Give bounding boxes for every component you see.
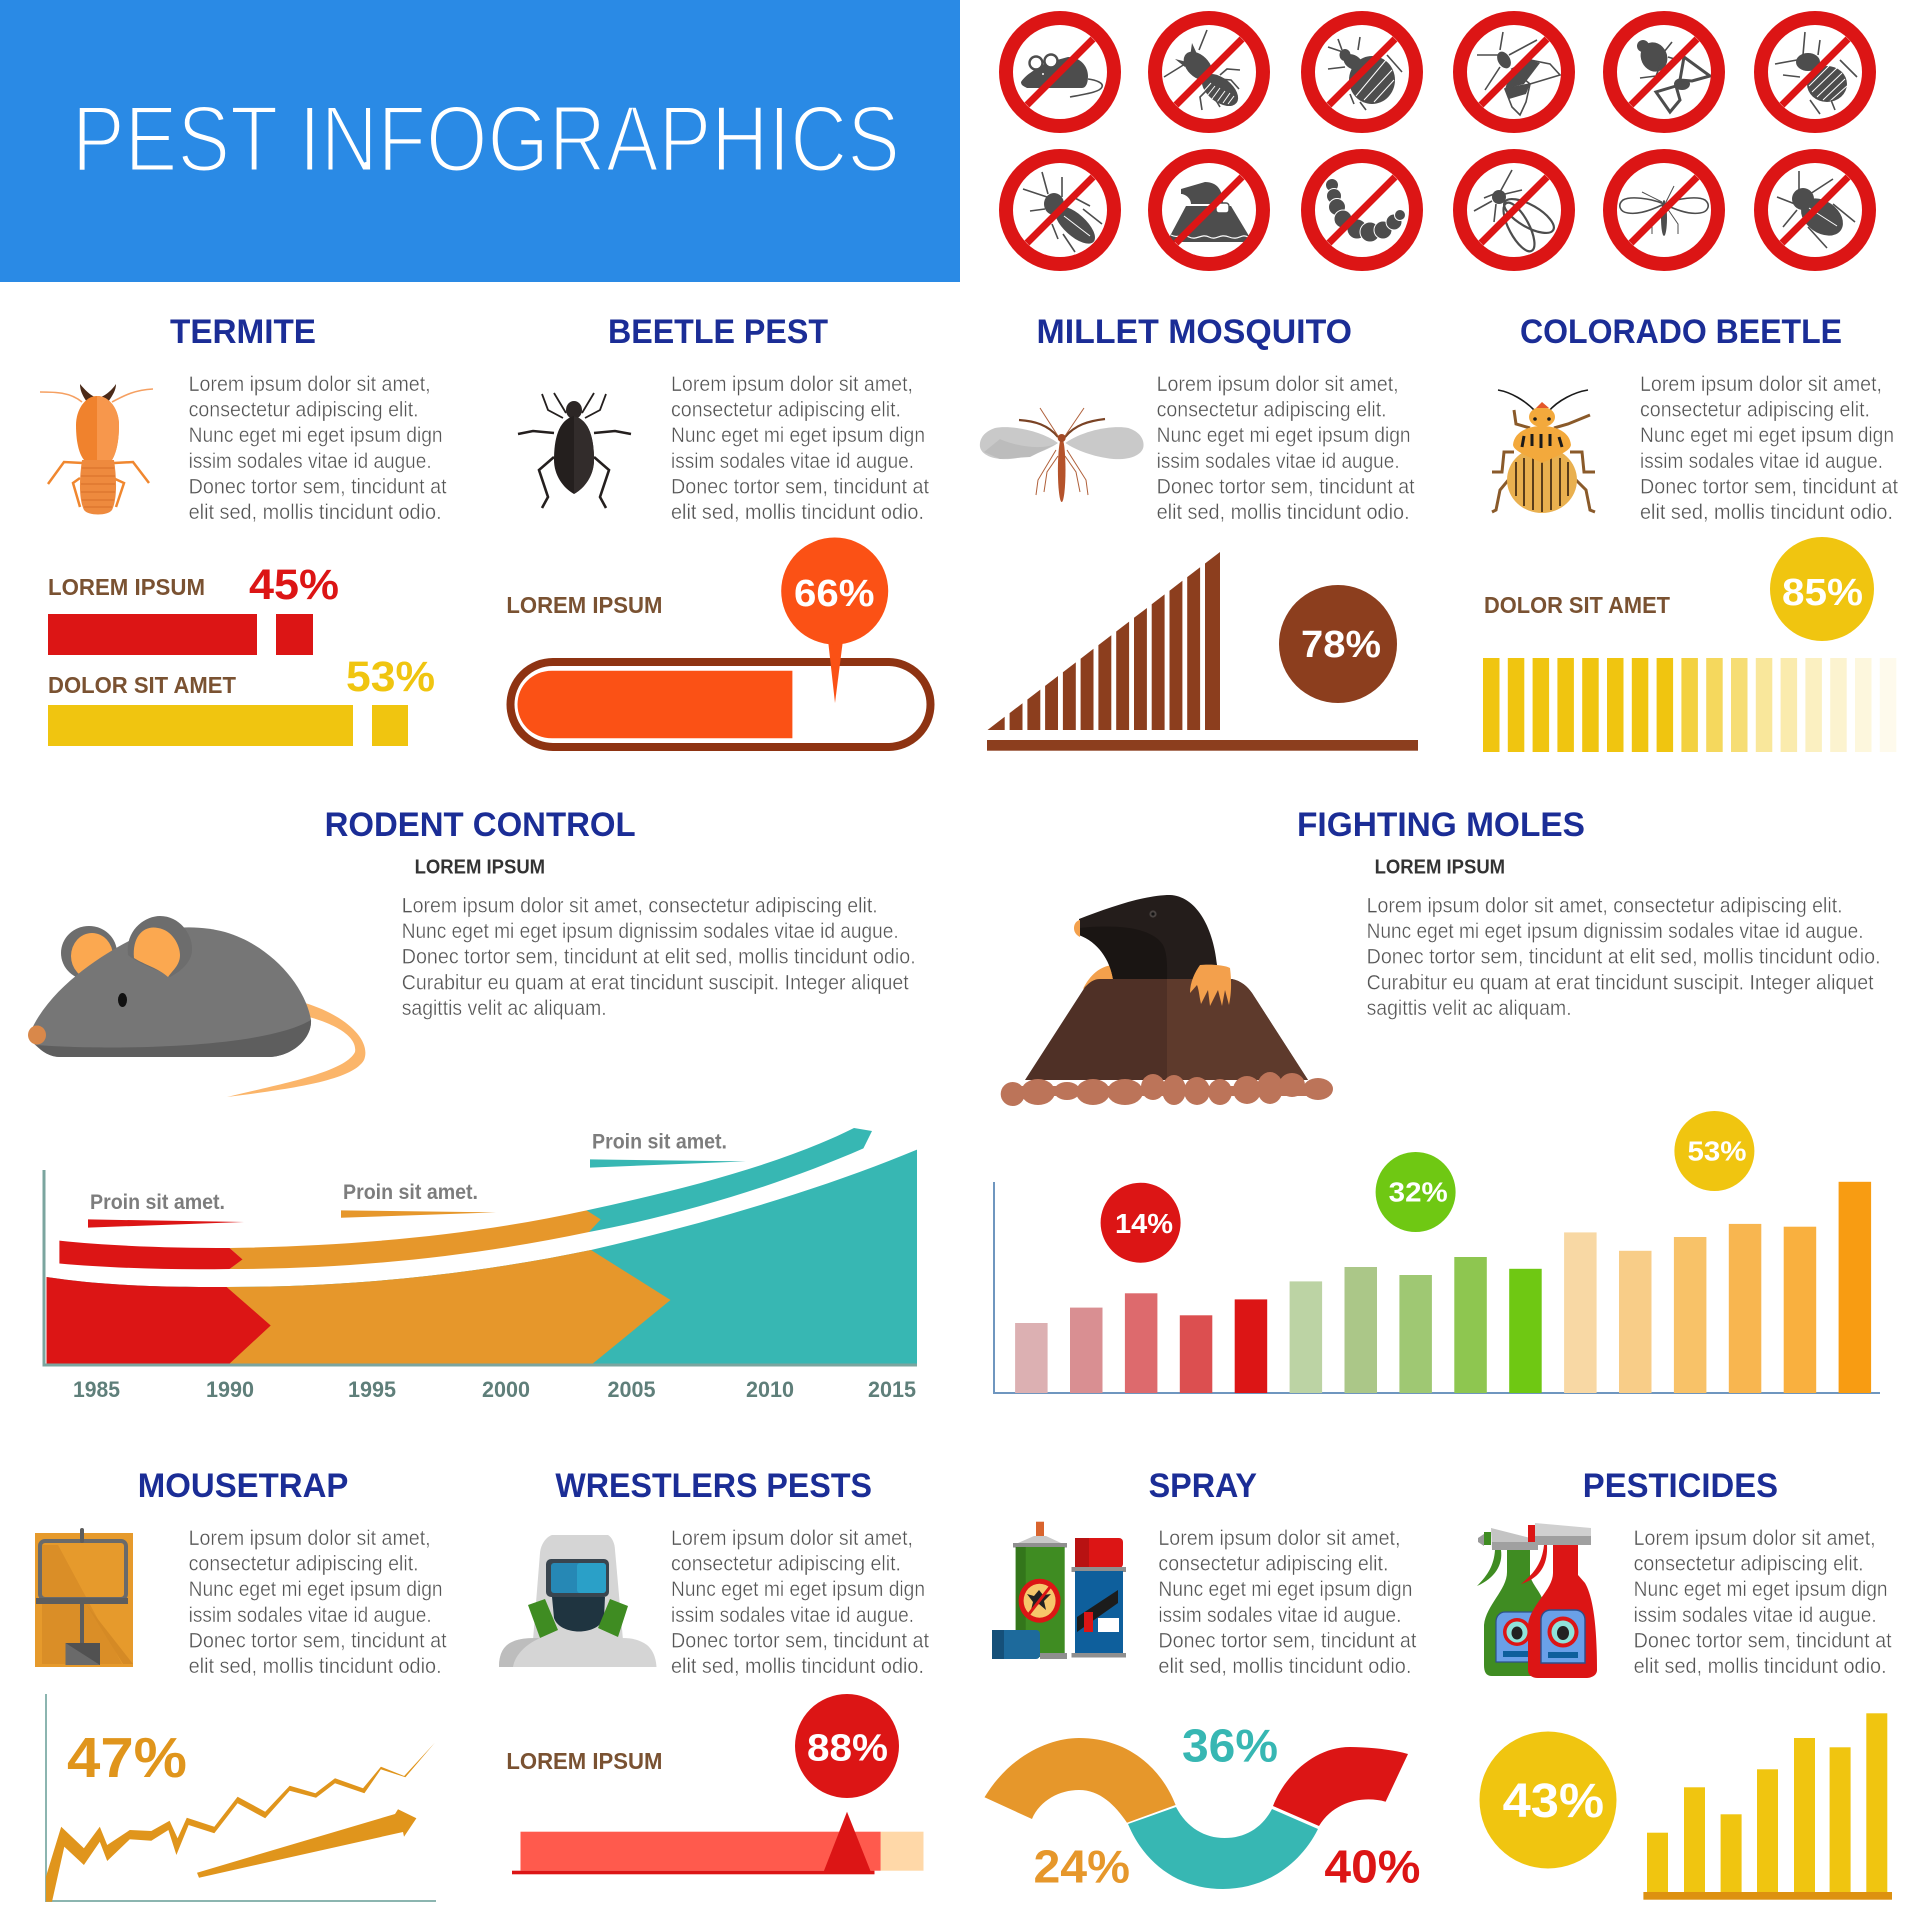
text block [1640, 373, 1898, 524]
text block: elit sed, mollis tincidunt odio. [189, 1655, 442, 1678]
text block: elit sed, mollis tincidunt odio. [671, 1655, 924, 1678]
text block: consectetur adipiscing elit. [189, 1553, 419, 1576]
wave chart: 24% [1034, 1841, 1130, 1893]
text block: issim sodales vitae id augue. [671, 1604, 914, 1627]
capsule progress chart 66%: LOREM IPSUM [506, 592, 662, 618]
text block [671, 373, 929, 524]
bar chart: two progress bars [48, 561, 435, 746]
text block: Nunc eget mi eget ipsum dignissim sodales vitae id augue. [1367, 920, 1864, 943]
bar chart: two progress bars: LOREM IPSUM [48, 574, 205, 600]
text block: issim sodales vitae id augue. [1157, 450, 1400, 473]
stepped bar chart 78% [987, 552, 1418, 751]
callout: 32% [1376, 1152, 1456, 1232]
capsule progress chart 66% [506, 538, 930, 747]
callout: 32%: 32% [1389, 1176, 1448, 1207]
text block: Nunc eget mi eget ipsum dign [1157, 424, 1411, 447]
illustration: mole on mound [1001, 895, 1333, 1106]
text block: elit sed, mollis tincidunt odio. [189, 501, 442, 524]
text block: elit sed, mollis tincidunt odio. [1634, 1655, 1887, 1678]
text block: Lorem ipsum dolor sit amet, [671, 1527, 913, 1550]
text block: issim sodales vitae id augue. [189, 450, 432, 473]
icon: no winged fly [1460, 156, 1568, 264]
icon: no moth [1460, 18, 1568, 126]
icon: black beetle [518, 393, 631, 508]
wave chart: 36% [1182, 1720, 1278, 1772]
callout: first period [88, 1191, 244, 1228]
callout: 53% [1674, 1111, 1754, 1191]
line chart 47% [46, 1694, 436, 1902]
text block: Donec tortor sem, tincidunt at [671, 1629, 929, 1652]
year labels: 2000 [482, 1377, 530, 1402]
year labels [73, 1377, 916, 1402]
text block: consectetur adipiscing elit. [189, 399, 419, 422]
icon: spray bottles [1477, 1523, 1597, 1678]
prohibition icons grid [1006, 18, 1869, 264]
bar chart with 43% circle [1480, 1713, 1892, 1900]
text block: issim sodales vitae id augue. [1158, 1604, 1401, 1627]
year labels: 1995 [348, 1377, 396, 1402]
text block: Lorem ipsum dolor sit amet, consectetur adipiscing elit. [1367, 894, 1843, 918]
panel: rodent control [28, 806, 917, 1402]
heading: mousetrap: MOUSETRAP [138, 1467, 348, 1505]
text block: Donec tortor sem, tincidunt at [1634, 1629, 1892, 1652]
year labels: 2005 [608, 1377, 656, 1402]
text block: Lorem ipsum dolor sit amet, [1640, 373, 1882, 396]
text block: Donec tortor sem, tincidunt at elit sed, mollis tincidunt odio. [402, 946, 916, 969]
text block: elit sed, mollis tincidunt odio. [1158, 1655, 1411, 1678]
icon: no bug [1308, 18, 1416, 126]
icon: mosquito [980, 408, 1144, 502]
heading: beetle pest: BEETLE PEST [608, 313, 828, 351]
year labels: 2015 [868, 1377, 916, 1402]
text block: elit sed, mollis tincidunt odio. [1640, 501, 1893, 524]
capsule progress chart 66%: 66% [794, 573, 874, 615]
panel: pesticides [1477, 1467, 1892, 1900]
text block: issim sodales vitae id augue. [189, 1604, 432, 1627]
text block: Lorem ipsum dolor sit amet, [189, 1527, 431, 1550]
panel: fighting moles [994, 806, 1881, 1393]
progress bar 88% [506, 1694, 924, 1874]
text block: issim sodales vitae id augue. [1640, 450, 1883, 473]
text block: Lorem ipsum dolor sit amet, [1157, 373, 1399, 396]
bar chart: two progress bars: DOLOR SIT AMET [48, 672, 236, 698]
icon: spray cans [992, 1522, 1126, 1659]
icon: no cockroach [1006, 156, 1114, 264]
icon: protective suit [499, 1535, 656, 1667]
text block: elit sed, mollis tincidunt odio. [671, 501, 924, 524]
panel: colorado beetle [1483, 313, 1898, 752]
text block: Donec tortor sem, tincidunt at [1158, 1629, 1417, 1652]
callout: second period [341, 1181, 496, 1218]
callout: third period: Proin sit amet. [592, 1130, 727, 1153]
text block: Curabitur eu quam at erat tincidunt suscipit. Integer aliquet [1367, 971, 1874, 994]
text block: Lorem ipsum dolor sit amet, [189, 373, 431, 396]
icon: no beetle [1761, 156, 1869, 264]
text block [402, 894, 916, 1020]
text block: Donec tortor sem, tincidunt at [189, 1629, 447, 1652]
text block: Donec tortor sem, tincidunt at elit sed, mollis tincidunt odio. [1367, 946, 1881, 969]
text block: Lorem ipsum dolor sit amet, [1634, 1527, 1876, 1550]
icon: no larva [1308, 156, 1416, 264]
subheading: LOREM IPSUM [415, 856, 545, 878]
callout: third period [590, 1130, 746, 1168]
wave chart [984, 1720, 1420, 1893]
panel: mousetrap [35, 1467, 447, 1902]
text block: Lorem ipsum dolor sit amet, [671, 373, 913, 396]
illustration: mouse [28, 916, 365, 1097]
icon: no fly [1610, 18, 1718, 126]
line chart 47%: 47% [67, 1726, 187, 1790]
heading: millet mosquito: MILLET MOSQUITO [1036, 313, 1352, 351]
panel: wrestlers pests [499, 1467, 929, 1874]
text block: consectetur adipiscing elit. [1634, 1553, 1864, 1576]
panel: termite [40, 313, 447, 746]
icon: no mole [1155, 156, 1263, 264]
text block: consectetur adipiscing elit. [671, 1553, 901, 1576]
bar chart: two progress bars: 53% [346, 653, 435, 701]
year labels: 1990 [206, 1377, 254, 1402]
text block [189, 373, 447, 524]
callout: first period: Proin sit amet. [90, 1191, 225, 1214]
text block: consectetur adipiscing elit. [1640, 399, 1870, 422]
fading bar gauge 85%: 85% [1782, 572, 1863, 614]
text block [1158, 1527, 1417, 1678]
icon: termite [40, 384, 153, 514]
text block: sagittis velit ac aliquam. [402, 997, 607, 1020]
text block: elit sed, mollis tincidunt odio. [1157, 501, 1410, 524]
heading: termite: TERMITE [170, 313, 316, 351]
text block: sagittis velit ac aliquam. [1367, 997, 1572, 1020]
year labels: 2010 [746, 1377, 794, 1402]
bar chart with 43% circle: 43% [1503, 1775, 1604, 1828]
text block: Nunc eget mi eget ipsum dign [189, 424, 443, 447]
title: PEST INFOGRAPHICS [72, 86, 900, 191]
text block [671, 1527, 929, 1678]
text block: Donec tortor sem, tincidunt at [671, 475, 929, 498]
text block: Lorem ipsum dolor sit amet, consectetur adipiscing elit. [402, 894, 878, 918]
panel: beetle pest [506, 313, 930, 747]
text block: Lorem ipsum dolor sit amet, [1158, 1527, 1400, 1550]
progress bar 88%: LOREM IPSUM [506, 1748, 662, 1774]
panel: millet mosquito [980, 313, 1418, 751]
text block: Nunc eget mi eget ipsum dign [671, 424, 925, 447]
text block: Donec tortor sem, tincidunt at [189, 475, 447, 498]
icon: no colorado beetle [1761, 18, 1869, 126]
heading: fighting moles: FIGHTING MOLES [1297, 806, 1585, 844]
fading bar gauge 85% [1483, 537, 1896, 752]
text block: Nunc eget mi eget ipsum dign [1634, 1578, 1888, 1601]
icon: mousetrap [35, 1528, 133, 1667]
text block: Curabitur eu quam at erat tincidunt suscipit. Integer aliquet [402, 971, 909, 994]
text block: Donec tortor sem, tincidunt at [1640, 475, 1898, 498]
subheading: LOREM IPSUM [1375, 856, 1505, 878]
bar chart: sixteen bars [994, 1111, 1880, 1393]
text block: issim sodales vitae id augue. [1634, 1604, 1877, 1627]
fading bar gauge 85%: DOLOR SIT AMET [1484, 592, 1670, 618]
icon: no termite [1155, 18, 1263, 126]
text block: consectetur adipiscing elit. [671, 399, 901, 422]
text block: consectetur adipiscing elit. [1158, 1553, 1388, 1576]
icon: colorado beetle [1492, 390, 1595, 513]
callout: 14%: 14% [1115, 1208, 1173, 1239]
text block [1367, 894, 1881, 1020]
header banner [0, 0, 960, 282]
heading: spray: SPRAY [1149, 1467, 1257, 1505]
callout: 14% [1101, 1183, 1181, 1263]
stepped bar chart 78%: 78% [1301, 624, 1381, 666]
panel: spray [984, 1467, 1420, 1893]
icon: no mouse [1006, 18, 1114, 126]
heading: rodent control: RODENT CONTROL [325, 806, 636, 844]
axes [44, 1170, 917, 1365]
text block: Nunc eget mi eget ipsum dign [1158, 1578, 1412, 1601]
year labels: 1985 [73, 1377, 120, 1402]
text block: Nunc eget mi eget ipsum dign [189, 1578, 443, 1601]
text block [189, 1527, 447, 1678]
heading: wrestlers pests: WRESTLERS PESTS [555, 1467, 872, 1505]
text block: Donec tortor sem, tincidunt at [1157, 475, 1415, 498]
progress bar 88%: 88% [807, 1728, 888, 1770]
wave chart: 40% [1324, 1841, 1420, 1893]
text block: Nunc eget mi eget ipsum dign [1640, 424, 1894, 447]
text block [1634, 1527, 1892, 1678]
text block: consectetur adipiscing elit. [1157, 399, 1387, 422]
callout: 53%: 53% [1688, 1136, 1747, 1167]
callout: second period: Proin sit amet. [343, 1181, 478, 1204]
bar chart: two progress bars: 45% [249, 561, 339, 609]
heading: pesticides: PESTICIDES [1583, 1467, 1778, 1505]
heading: colorado beetle: COLORADO BEETLE [1520, 313, 1842, 351]
icon: no mosquito [1610, 156, 1718, 264]
text block: Nunc eget mi eget ipsum dignissim sodales vitae id augue. [402, 920, 899, 943]
text block [1157, 373, 1415, 524]
area chart with timeline [44, 1128, 917, 1402]
text block: issim sodales vitae id augue. [671, 450, 914, 473]
text block: Nunc eget mi eget ipsum dign [671, 1578, 925, 1601]
